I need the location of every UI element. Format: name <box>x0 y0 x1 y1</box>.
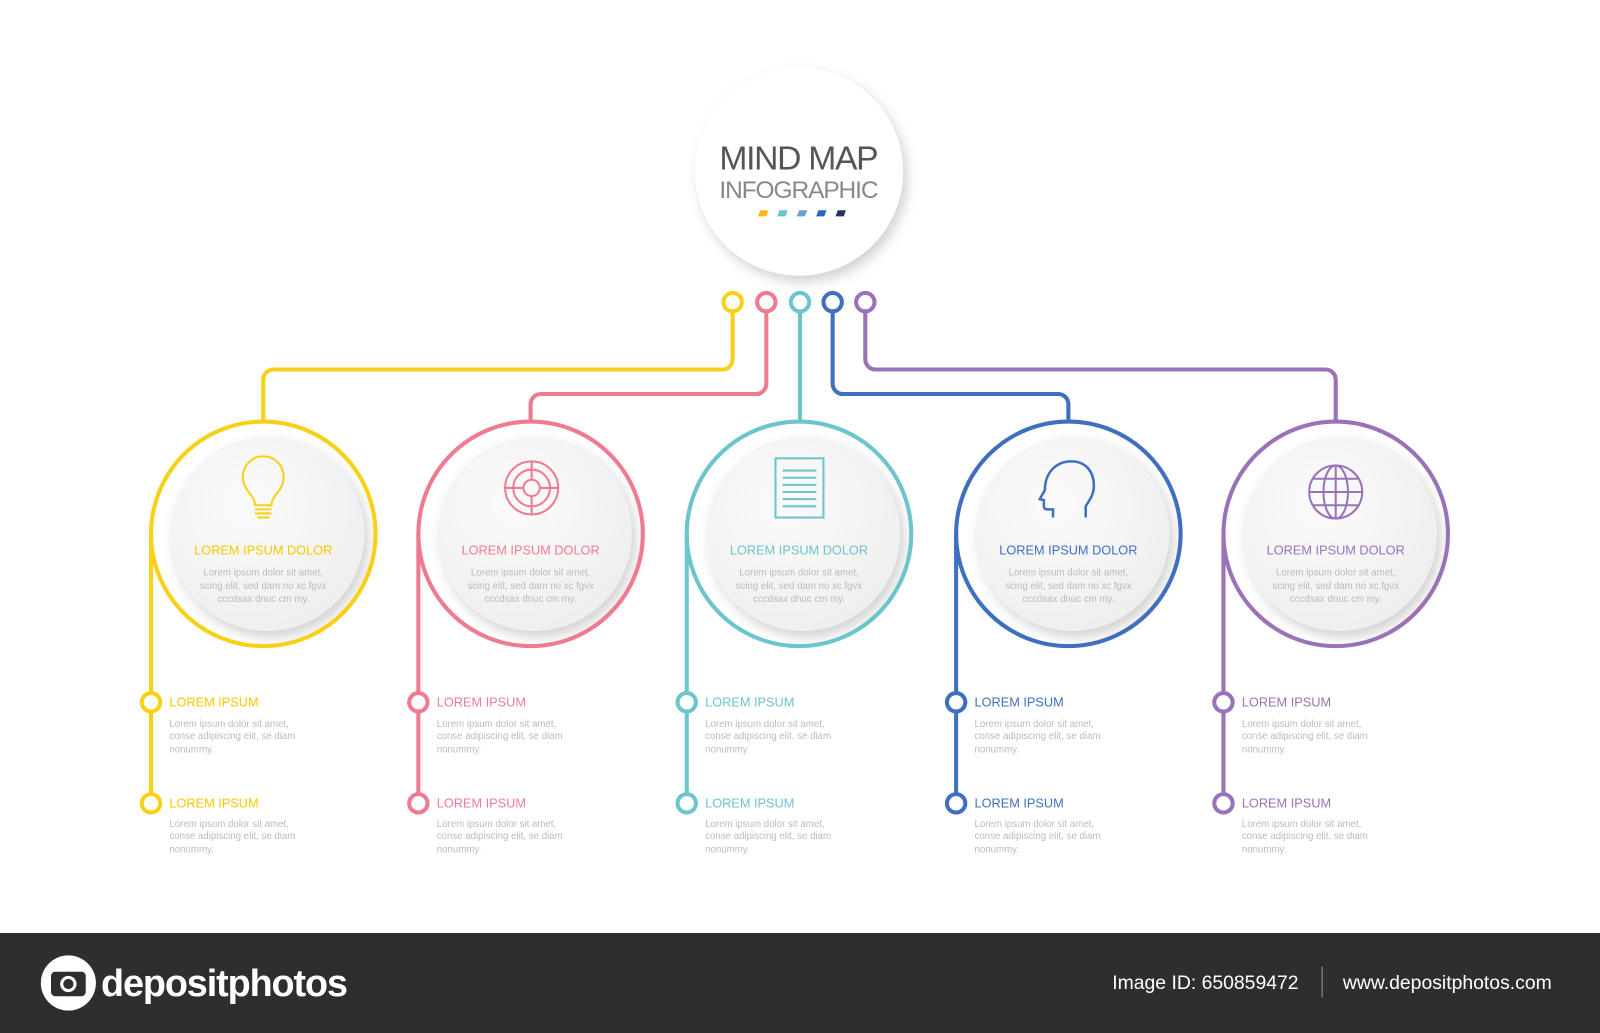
panel: purple: conse adipiscing elit, se diam <box>1242 831 1368 842</box>
panel: blue: LOREM IPSUM DOLOR <box>999 542 1137 557</box>
panel: pink <box>409 422 643 855</box>
panel: blue: Lorem ipsum dolor sit amet, <box>1009 568 1128 579</box>
panel: yellow: conse adipiscing elit, se diam <box>169 831 295 842</box>
panel: pink: nonummy. <box>437 844 481 855</box>
panel: pink: scing elit, sed dam no xc fgvx <box>467 581 594 592</box>
logo text: depositphotos <box>101 963 348 1005</box>
panel: blue: LOREM IPSUM <box>974 795 1064 810</box>
panel: purple: LOREM IPSUM <box>1242 795 1331 810</box>
panel: yellow: Lorem ipsum dolor sit amet, <box>169 819 289 830</box>
icon: camera logo <box>41 955 96 1011</box>
panel: purple: Lorem ipsum dolor sit amet, <box>1242 719 1361 730</box>
panel: pink: cccdsax dnuc cm my. <box>485 594 577 605</box>
icon: globe <box>1309 465 1362 519</box>
panel: purple: conse adipiscing elit, se diam <box>1242 731 1368 742</box>
panel: teal: LOREM IPSUM <box>705 795 794 810</box>
icon: target chart <box>505 461 558 514</box>
panel: pink: Lorem ipsum dolor sit amet, <box>437 819 556 830</box>
panel: blue: LOREM IPSUM <box>974 694 1064 709</box>
panel: teal: LOREM IPSUM DOLOR <box>730 542 868 557</box>
panel: pink: Lorem ipsum dolor sit amet, <box>471 568 590 579</box>
panel: blue: nonummy. <box>974 744 1019 755</box>
panel: blue: scing elit, sed dam no xc fgvx <box>1005 581 1132 592</box>
icon: bulb <box>243 456 284 518</box>
footer bar <box>0 933 1600 1033</box>
panel: blue: cccdsax dnuc cm my. <box>1022 594 1114 605</box>
icon: document <box>776 458 823 518</box>
panel: teal: Lorem ipsum dolor sit amet, <box>705 819 825 830</box>
panel: yellow: Lorem ipsum dolor sit amet, <box>169 719 289 730</box>
panel: pink: nonummy. <box>437 744 481 755</box>
icon: head profile <box>1040 461 1094 518</box>
panel: purple: LOREM IPSUM <box>1242 694 1331 709</box>
panel: blue: Lorem ipsum dolor sit amet, <box>974 719 1094 730</box>
panel: teal: Lorem ipsum dolor sit amet, <box>705 719 825 730</box>
subtitle: INFOGRAPHIC <box>719 177 879 204</box>
panel: teal: scing elit, sed dam no xc fgvx <box>736 581 862 592</box>
panel: pink: conse adipiscing elit, se diam <box>437 831 563 842</box>
panel: blue: conse adipiscing elit, se diam <box>974 731 1100 742</box>
panel: yellow: LOREM IPSUM <box>169 694 259 709</box>
panel: blue <box>947 422 1181 855</box>
panel: teal: nonummy. <box>705 744 750 755</box>
panel: blue: nonummy. <box>974 844 1019 855</box>
panel: purple: LOREM IPSUM DOLOR <box>1267 542 1405 557</box>
panel: teal <box>678 422 911 855</box>
color dashes <box>758 210 846 216</box>
panel: purple <box>1214 422 1448 855</box>
panel: teal: cccdsax dnuc cm my. <box>753 594 845 605</box>
panel: pink: conse adipiscing elit, se diam <box>437 731 563 742</box>
panel: yellow: Lorem ipsum dolor sit amet, <box>204 568 323 579</box>
panel: yellow: cccdsax dnuc cm my. <box>217 594 309 605</box>
panel: pink: LOREM IPSUM DOLOR <box>462 542 600 557</box>
panel: purple: nonummy. <box>1242 744 1286 755</box>
panel: blue: Lorem ipsum dolor sit amet, <box>974 819 1094 830</box>
panel: purple: cccdsax dnuc cm my. <box>1290 594 1382 605</box>
title circle <box>695 67 903 276</box>
panel: yellow: scing elit, sed dam no xc fgvx <box>200 581 327 592</box>
website: www.depositphotos.com <box>1342 972 1552 994</box>
panel: teal: Lorem ipsum dolor sit amet, <box>739 568 859 579</box>
panel: teal: nonummy. <box>705 844 750 855</box>
title: MIND MAP <box>719 140 879 177</box>
panel: teal: LOREM IPSUM <box>705 694 794 709</box>
connector lines <box>263 293 1336 421</box>
panel: pink: LOREM IPSUM <box>437 795 526 810</box>
panel: pink: LOREM IPSUM <box>437 694 526 709</box>
panel: purple: Lorem ipsum dolor sit amet, <box>1276 568 1395 579</box>
panel: yellow: LOREM IPSUM DOLOR <box>194 542 332 557</box>
panel: teal: conse adipiscing elit, se diam <box>705 731 831 742</box>
image id: Image ID: 650859472 <box>1112 972 1299 994</box>
panel: purple: Lorem ipsum dolor sit amet, <box>1242 819 1361 830</box>
panel: yellow: nonummy. <box>169 844 214 855</box>
panel: pink: Lorem ipsum dolor sit amet, <box>437 719 556 730</box>
panel: yellow: nonummy. <box>169 744 214 755</box>
panel: purple: scing elit, sed dam no xc fgvx <box>1272 581 1399 592</box>
panel: blue: conse adipiscing elit, se diam <box>974 831 1100 842</box>
panel: teal: conse adipiscing elit, se diam <box>705 831 831 842</box>
panel: yellow: LOREM IPSUM <box>169 795 259 810</box>
panel: yellow <box>142 422 376 855</box>
panel: purple: nonummy. <box>1242 844 1286 855</box>
panel: yellow: conse adipiscing elit, se diam <box>169 731 295 742</box>
